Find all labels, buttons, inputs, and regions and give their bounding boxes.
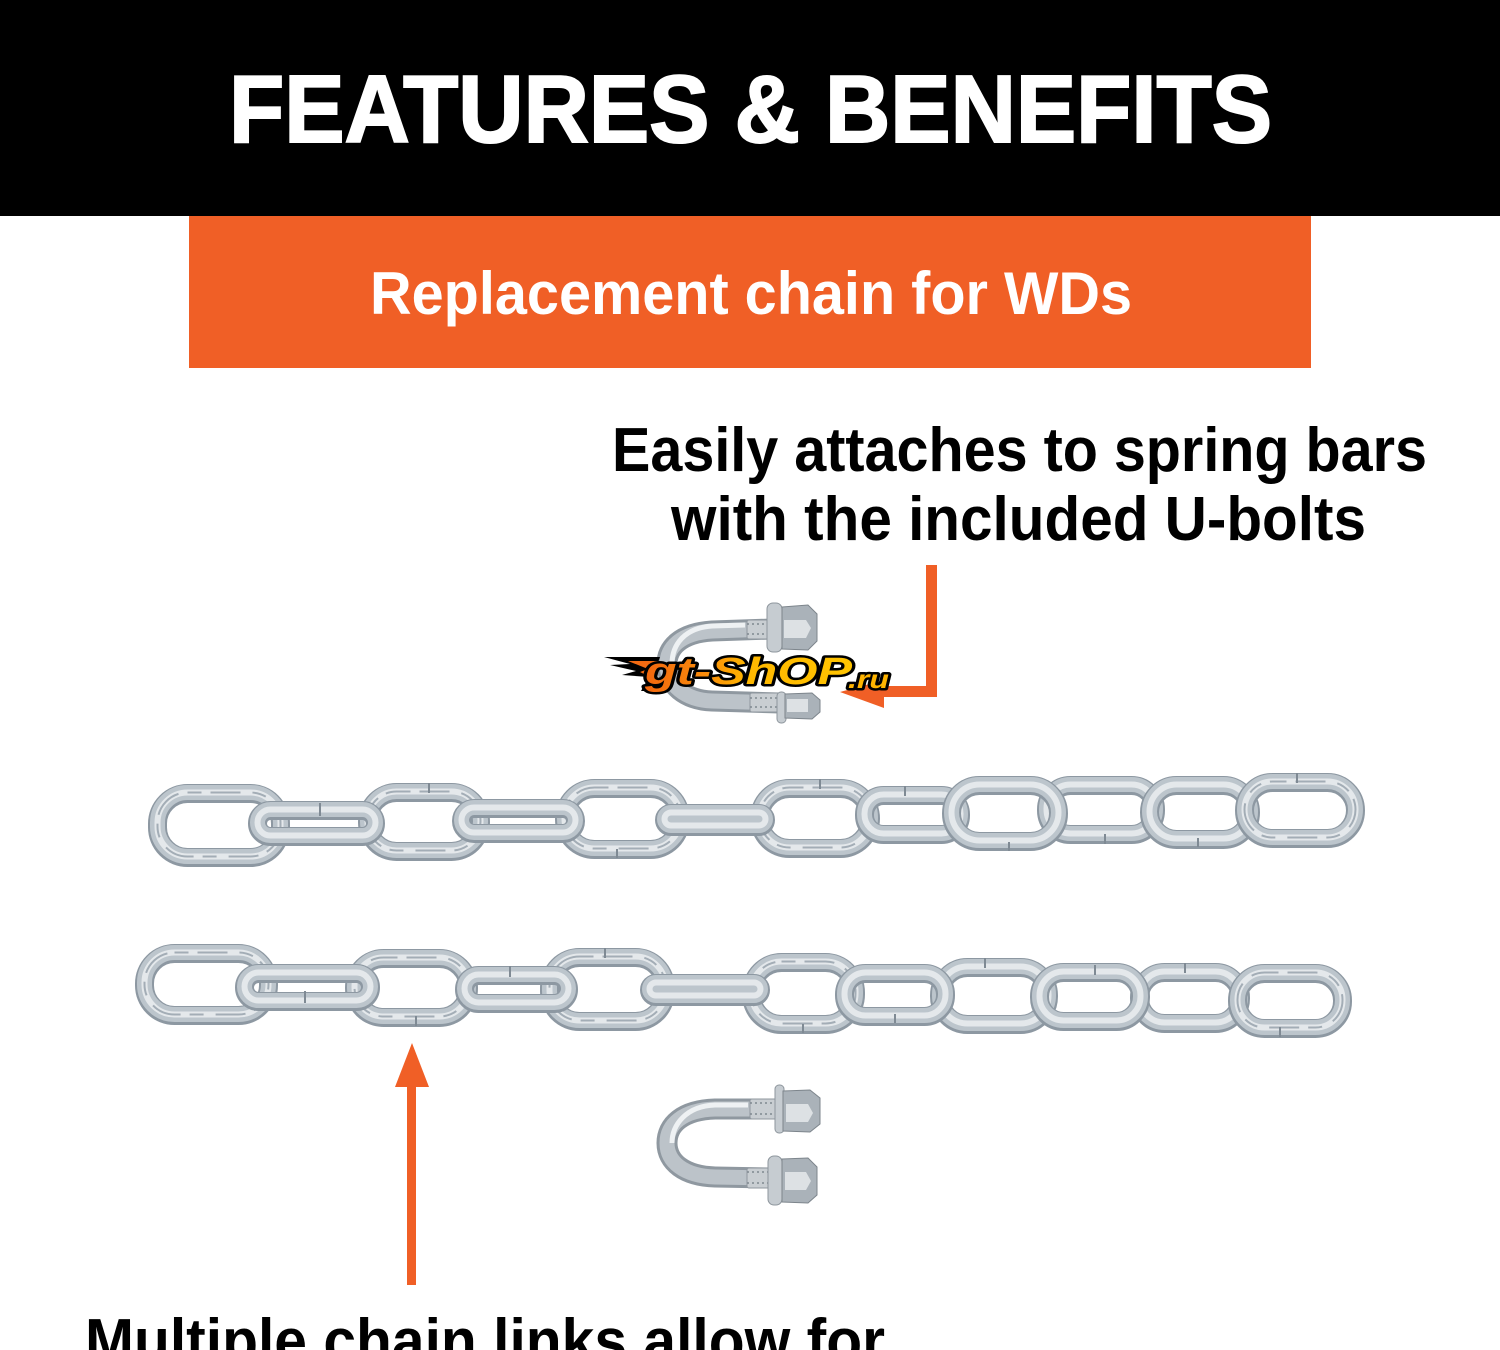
icon: lower U-bolt [667,1085,820,1205]
title: FEATURES & BENEFITS [229,56,1272,163]
subtitle text: Replacement chain for WDs [370,260,1132,327]
subtitle banner [189,216,1311,368]
callout: U-bolts: with the included U-bolts [670,485,1366,554]
logo text: gt-ShOP [644,651,853,693]
callout: U-bolts [612,416,1427,554]
chain: upper [158,773,1356,858]
icon: upper U-bolt [667,603,820,723]
logo flames [604,657,660,691]
arrow: to upper U-bolt [840,565,937,708]
chain: lower [144,948,1342,1037]
arrow: to lower chain [395,1043,429,1285]
callout: U-bolts: Easily attaches to spring bars [612,416,1427,485]
watermark logo: gt-shop.ru [604,651,889,694]
header band [0,0,1500,216]
logo domain: .ru [848,664,889,694]
